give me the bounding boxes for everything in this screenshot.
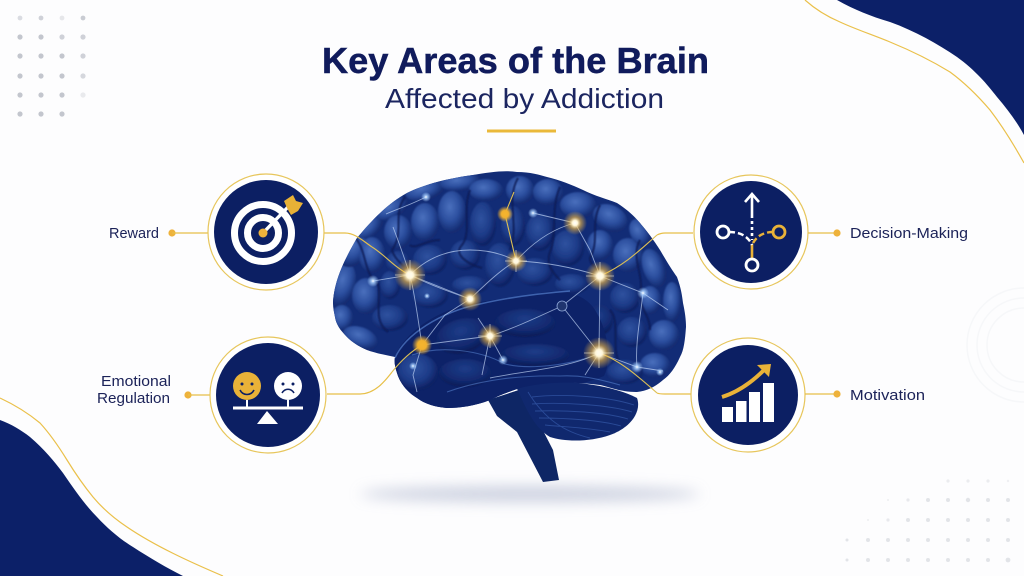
temporal lobe [393,291,620,412]
icon: target with arrow [208,174,324,290]
label: Emotional Regulation: Emotional [101,374,171,390]
glowing nodes [367,192,664,376]
label: Reward [109,226,208,242]
gold connection traces in brain [372,192,657,393]
label: Motivation [805,388,925,404]
icon: emotional balance scale [210,337,326,453]
title: Key Areas of the Brain [322,40,709,81]
corner wave: top right [805,0,1024,163]
connector lines from icons to brain [324,233,693,394]
brainstem [488,388,559,482]
label: Emotional Regulation [97,374,210,407]
label: Motivation: Motivation [850,388,925,404]
label: Decision-Making [808,226,968,242]
cerebellum [515,382,638,441]
label: Decision-Making: Decision-Making [850,226,968,242]
icon: growth chart [691,338,805,452]
subtitle: Affected by Addiction [385,83,664,114]
gyri [326,171,681,384]
brain ground shadow [360,486,700,502]
cerebrum [325,165,695,415]
sulci [353,178,650,360]
neural network lines [373,197,668,392]
icon: decision paths [694,175,808,289]
decorative dots: bottom right [846,479,1010,562]
decorative dots: top left [17,16,86,117]
label: Emotional Regulation: Regulation [97,391,170,407]
label: Reward: Reward [109,226,159,242]
brain illustration [325,165,695,482]
decorative rings: right [967,288,1024,402]
corner wave: bottom left [0,398,223,576]
title underline [487,130,556,132]
